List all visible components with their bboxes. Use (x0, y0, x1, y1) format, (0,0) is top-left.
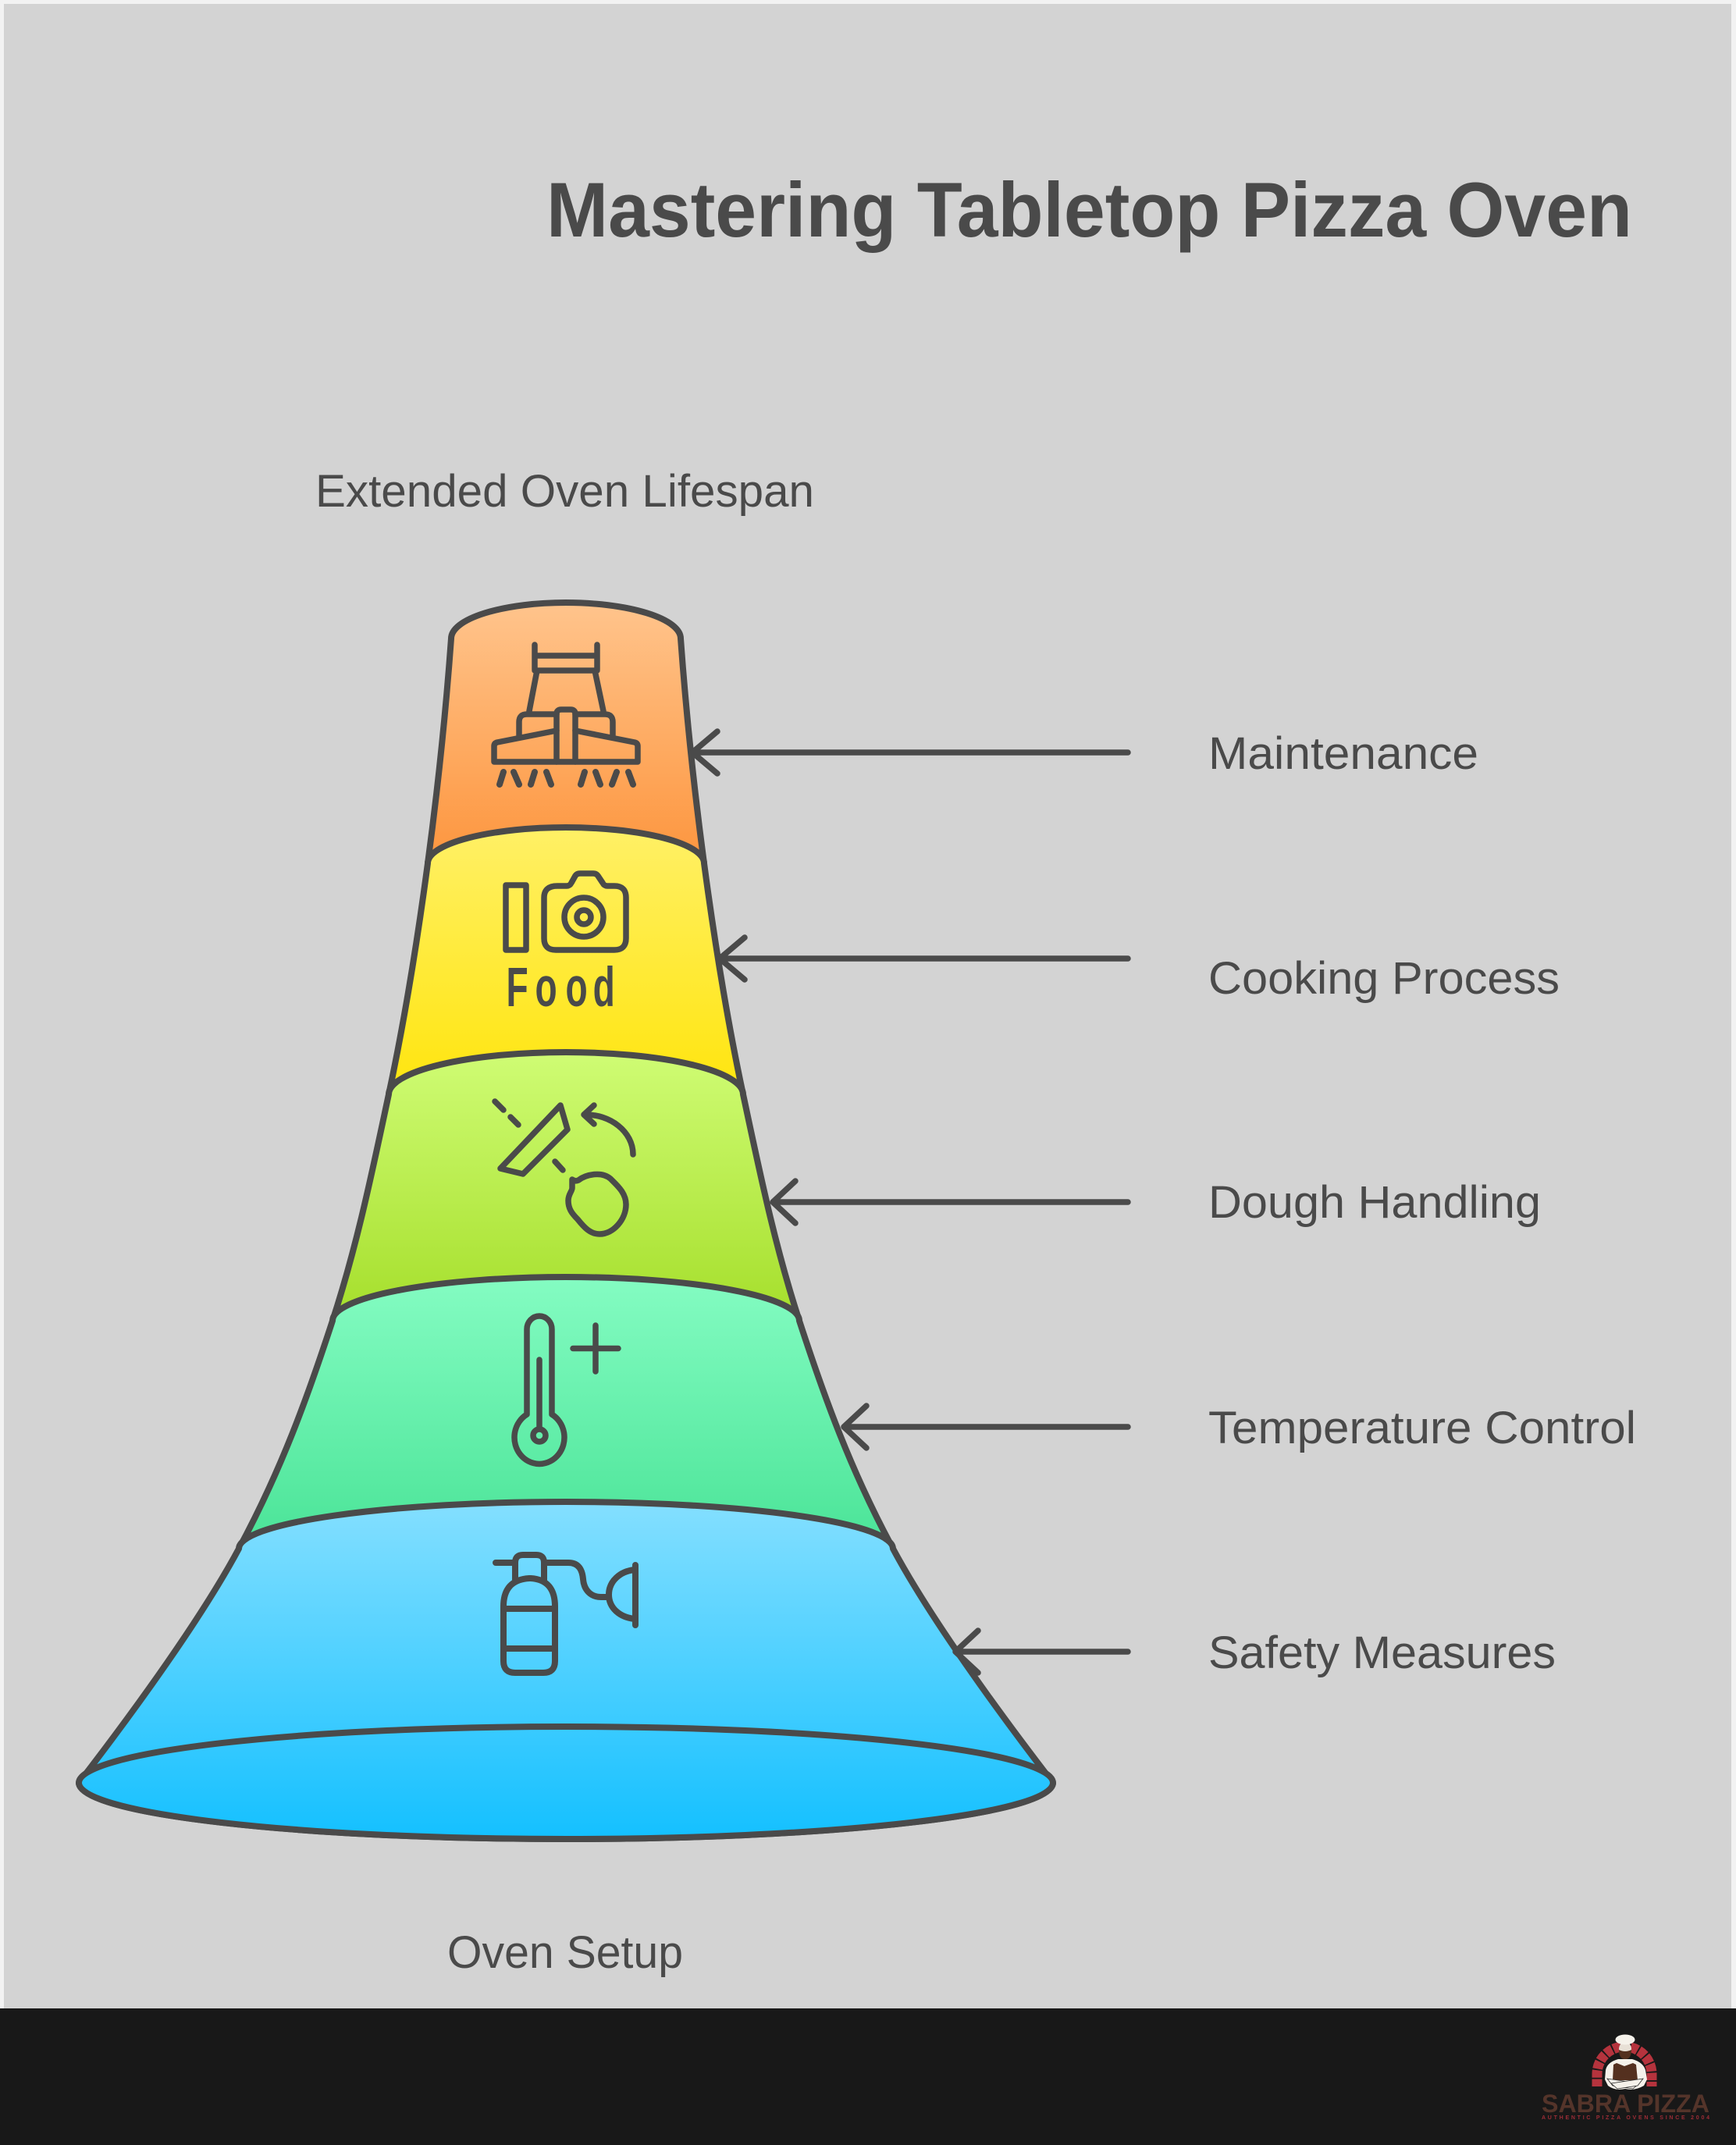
icon: oxygen tank and mask (496, 1555, 635, 1673)
cone diagram (79, 603, 1053, 1839)
logo: chef (1605, 2034, 1647, 2090)
cone tier 4: temperature control (239, 1277, 893, 1565)
cone tier 1: maintenance (428, 603, 704, 878)
logo: brick arch (1597, 2047, 1652, 2086)
label: Temperature Control: Temperature Control (1208, 1403, 1636, 1453)
icon: peel and dough (495, 1101, 633, 1234)
icon: thermometer with plus (514, 1316, 618, 1464)
icon: floor cleaner (494, 645, 638, 784)
cone tier 5: safety measures (79, 1502, 1053, 1839)
icon: camera with food caption (506, 873, 626, 1018)
cone tier 3: dough handling (333, 1052, 799, 1339)
cone base ellipse (79, 1727, 1053, 1839)
label: Maintenance: Maintenance (1208, 728, 1478, 779)
arrow: dough handling (773, 1181, 1128, 1223)
logo: tagline: AUTHENTIC PIZZA OVENS SINCE 2004 (1542, 2115, 1709, 2121)
title: Mastering Tabletop Pizza Oven (546, 166, 1632, 253)
arrow: maintenance (692, 731, 1128, 774)
label: Safety Measures: Safety Measures (1208, 1627, 1556, 1678)
footer logo: Sabra Pizza (1542, 2034, 1709, 2121)
label: Dough Handling: Dough Handling (1208, 1177, 1541, 1228)
footer bar (0, 2008, 1736, 2145)
top label: Extended Oven Lifespan: Extended Oven Lifespan (315, 466, 814, 517)
arrow: cooking process (720, 937, 1128, 980)
camera (506, 873, 626, 950)
cone tier 2: cooking process (389, 827, 743, 1112)
food caption: Food (506, 956, 615, 1018)
logo: wordmark: SABRA PIZZA (1542, 2090, 1709, 2118)
arrow: safety measures (955, 1631, 1128, 1673)
bottom label: Oven Setup: Oven Setup (447, 1927, 683, 1978)
label: Cooking Process: Cooking Process (1208, 953, 1560, 1004)
arrow: temperature control (844, 1406, 1128, 1448)
